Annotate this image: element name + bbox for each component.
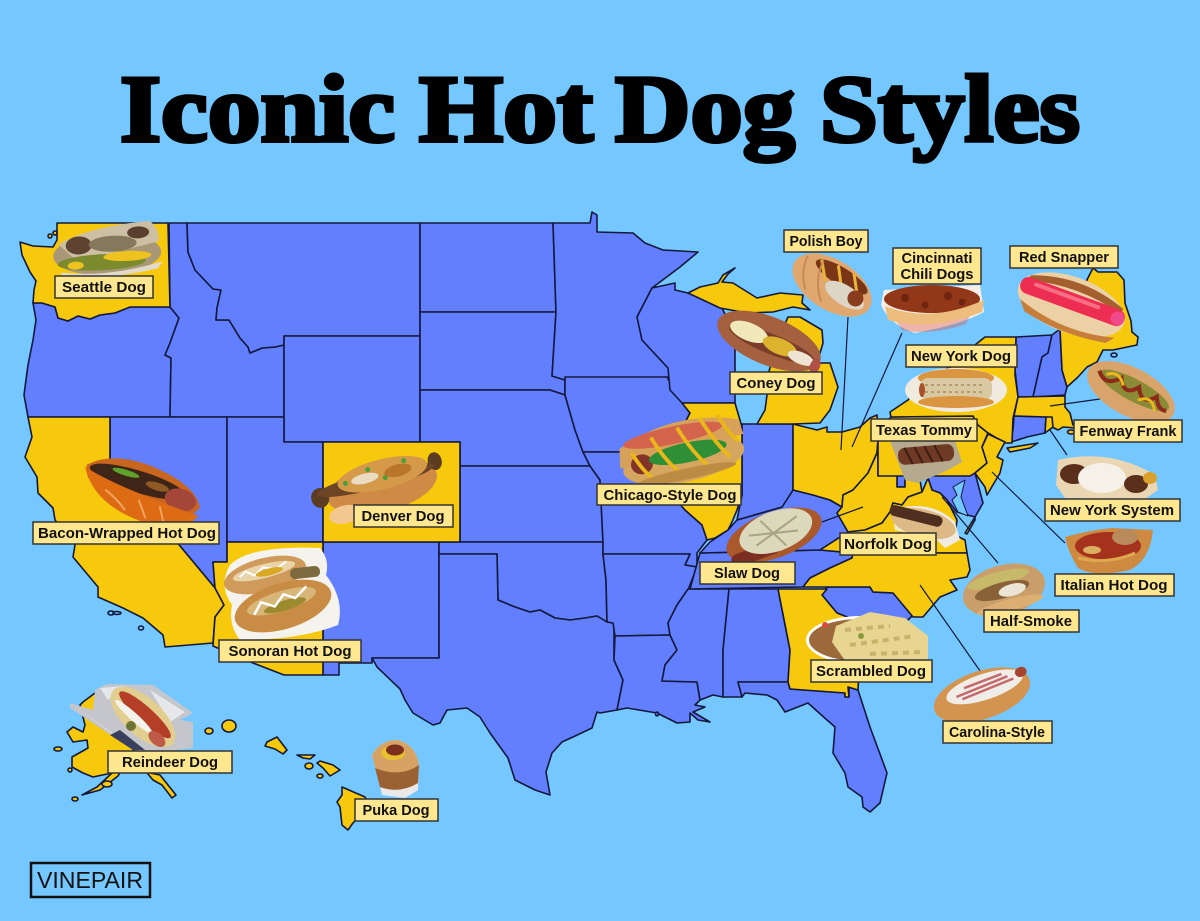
label: Reindeer Dog: Reindeer Dog [122, 754, 218, 771]
label: New York Dog: New York Dog [911, 348, 1011, 365]
state: Rhode Island [1045, 417, 1053, 433]
food: Texas Tommy [890, 441, 962, 483]
label: Italian Hot Dog [1055, 574, 1174, 596]
label: Cincinnati Chili Dogs: Chili Dogs [900, 266, 974, 283]
label: Coney Dog: Coney Dog [736, 375, 816, 392]
state: Maryland and Delaware [897, 473, 983, 517]
label: New York Dog [906, 345, 1017, 367]
state: North Carolina [803, 553, 970, 617]
food: Seattle dog [52, 220, 163, 280]
label: Cincinnati Chili Dogs [893, 248, 981, 284]
state: North Dakota [420, 223, 556, 312]
map of the United States [20, 212, 1138, 830]
state: Washington [20, 223, 170, 321]
state: Oregon [24, 303, 179, 417]
food: Reindeer dog in foil [70, 676, 193, 758]
state: Nevada [110, 417, 227, 588]
title [120, 56, 1080, 162]
label: Red Snapper: Red Snapper [1019, 249, 1109, 266]
state: Indiana [737, 424, 793, 520]
state: Louisiana [614, 635, 710, 723]
state: Minnesota [552, 212, 698, 380]
label: Slaw Dog: Slaw Dog [714, 565, 780, 582]
state: Virginia [820, 478, 967, 553]
food: Red Snapper [1009, 259, 1134, 350]
title: Hot [419, 56, 593, 162]
state: Michigan lower peninsula [757, 317, 838, 424]
food: bacon-wrapped hot dog [74, 447, 209, 537]
state: Georgia [778, 589, 880, 697]
logo: VinePair [31, 863, 150, 897]
food: Sonoran hot dogs [220, 548, 340, 643]
Chesapeake bay [952, 480, 968, 516]
state: Kentucky [700, 490, 848, 553]
label: Coney Dog [730, 372, 822, 394]
label: Red Snapper [1010, 246, 1118, 268]
state: Connecticut [1008, 416, 1046, 443]
title: Styles [820, 56, 1080, 162]
state: Colorado [323, 442, 460, 542]
leader lines [822, 317, 1100, 678]
food: Fenway Frank [1077, 348, 1185, 436]
label: Slaw Dog [700, 562, 795, 584]
state: Ohio [793, 415, 878, 507]
label: Puka Dog [355, 799, 438, 821]
food: Italian hot dog [1065, 528, 1153, 574]
label: Denver Dog: Denver Dog [362, 508, 444, 525]
label: Texas Tommy: Texas Tommy [876, 422, 973, 439]
logo: VinePair: VINEPAIR [37, 867, 143, 893]
state: Vermont [1015, 335, 1052, 397]
state: Florida [738, 682, 887, 812]
label: Sonoran Hot Dog [219, 640, 361, 662]
label: New York System: New York System [1050, 502, 1174, 519]
food: Norfolk dog [885, 501, 960, 548]
food: Polish boy [781, 240, 883, 330]
food: Half-Smoke [957, 555, 1051, 625]
state: Tennessee [690, 550, 853, 589]
state: Wisconsin [637, 283, 735, 403]
food: Carolina-style dog [927, 657, 1037, 733]
food: Cincinnati chili dog [881, 285, 984, 333]
state: Hawaii [265, 737, 370, 830]
state: New Hampshire [1033, 329, 1067, 397]
state: Utah [227, 417, 323, 542]
state: Missouri [583, 452, 707, 567]
state: Wyoming [284, 336, 420, 442]
label: Norfolk Dog: Norfolk Dog [844, 536, 932, 553]
state: Michigan upper peninsula [688, 268, 810, 313]
food: Puka dog [372, 740, 419, 798]
state: South Carolina [822, 587, 913, 640]
state: New Jersey [975, 434, 1005, 495]
state: Massachusetts [1014, 396, 1080, 430]
state: Mississippi [662, 589, 729, 700]
label: Puka Dog: Puka Dog [362, 802, 430, 819]
label: Scrambled Dog: Scrambled Dog [816, 663, 926, 680]
food: New York System wiener [1056, 456, 1158, 499]
state: Iowa [565, 377, 690, 452]
state: Virginia eastern shore [965, 517, 975, 534]
state: Arizona [213, 542, 323, 675]
state: Alabama [723, 589, 790, 697]
label: Sonoran Hot Dog: Sonoran Hot Dog [228, 643, 352, 660]
title: Iconic [120, 56, 395, 162]
state: California [25, 417, 224, 647]
state: Idaho [165, 223, 284, 417]
food: Chicago-style dog [613, 409, 751, 495]
label: Seattle Dog: Seattle Dog [62, 279, 146, 296]
label: Carolina-Style: Carolina-Style [949, 724, 1045, 741]
label: Half-Smoke [984, 610, 1079, 632]
label: Bacon-Wrapped Hot Dog: Bacon-Wrapped Hot Dog [38, 525, 216, 542]
state: West Virginia [837, 440, 928, 532]
food: Coney dog [709, 298, 831, 385]
state: Kansas [460, 466, 603, 542]
label: Italian Hot Dog: Italian Hot Dog [1060, 577, 1168, 594]
state: Illinois [655, 403, 742, 540]
label: Polish Boy: Polish Boy [790, 233, 863, 250]
food: New York dog [905, 368, 1007, 412]
label: Norfolk Dog [840, 533, 936, 555]
state: New York [890, 337, 1018, 443]
state: Maine [1060, 268, 1138, 387]
title: Dog [615, 56, 795, 162]
label: Fenway Frank: Fenway Frank [1080, 423, 1177, 440]
label: Chicago-Style Dog: Chicago-Style Dog [604, 487, 736, 504]
food: Denver dog [306, 445, 451, 530]
label: Half-Smoke: Half-Smoke [990, 613, 1072, 630]
label: Seattle Dog [55, 276, 153, 298]
coastal islands [48, 231, 1117, 716]
state: Montana [187, 223, 420, 353]
state: Nebraska [420, 390, 590, 466]
state: New Mexico [323, 542, 439, 675]
state: Texas [372, 554, 623, 795]
food: Scrambled dog [806, 612, 928, 664]
food: Slaw dog [719, 496, 829, 574]
state: Pennsylvania [878, 416, 988, 476]
state: Alaska [54, 693, 236, 801]
state: Arkansas [603, 554, 697, 636]
label: Cincinnati Chili Dogs: Cincinnati [902, 250, 972, 267]
label: Denver Dog [354, 505, 453, 527]
state: Long Island [1007, 443, 1038, 452]
state: South Dakota [420, 312, 565, 395]
state: Oklahoma [439, 542, 607, 622]
label: Reindeer Dog [108, 751, 232, 773]
